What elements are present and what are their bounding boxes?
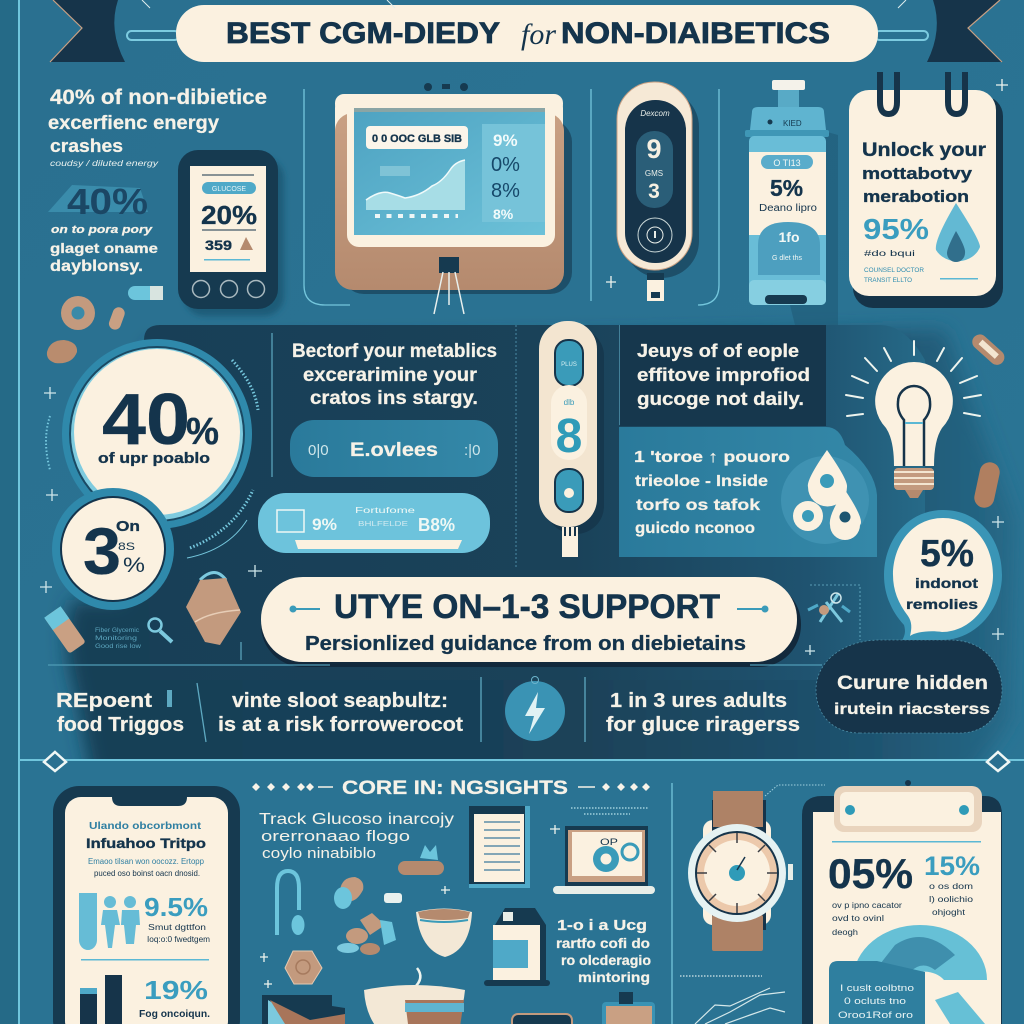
bottom strip: risk: is at a risk forrowerocot	[218, 714, 463, 736]
left text block: coudsy / diluted energy	[50, 159, 159, 168]
icon: tan capsule	[972, 460, 1002, 510]
title text: NON-DIAIBETICS	[561, 17, 830, 50]
icon: jar	[484, 908, 550, 986]
center glucose meter: dlb	[564, 398, 575, 407]
phone device: 20%	[201, 200, 257, 230]
big stat circle: 40	[102, 380, 190, 460]
donut chart	[853, 925, 987, 1024]
speech bubble stat	[884, 510, 1002, 644]
glucose meter top: Dexcom	[640, 109, 670, 118]
title banner	[50, 0, 1002, 62]
ribbon right	[927, 0, 1002, 62]
teal note: Oroo1Rof oro	[838, 1010, 913, 1020]
notepad: mottabotvy	[862, 164, 973, 183]
vertical divider bottom	[671, 783, 673, 1024]
big stat circle: of upr poablo	[98, 450, 210, 467]
icon: lightning circle	[505, 676, 565, 741]
teal panel with drops	[619, 427, 877, 557]
left text block: glaget oname	[50, 240, 158, 256]
clipboard: ov p ipno cacator	[832, 901, 902, 910]
notepad	[849, 72, 1003, 308]
monitor screen: 0 0 OOC GLB SIB	[372, 133, 462, 145]
icon: leaf bar	[398, 845, 444, 875]
title text	[226, 17, 830, 51]
text box: improved glucose: Jeuys of of eople	[637, 341, 799, 361]
icon: laptop: OP	[600, 837, 618, 847]
left text block	[48, 86, 267, 275]
clip	[834, 780, 982, 832]
text: monitoring: 1-o i a Ucg	[557, 917, 647, 934]
phone lower left: Emaoo tilsan won oocozz. Ertopp	[88, 857, 205, 866]
text: monitoring: rartfo cofi do	[556, 935, 650, 951]
horizontal rule	[48, 664, 822, 666]
left text block: dayblonsy.	[50, 258, 143, 275]
notepad: merabotion	[863, 187, 969, 206]
icon: steam and bowl	[364, 968, 465, 1024]
callout: support pill	[261, 577, 801, 667]
small label: Good rise low	[95, 644, 142, 650]
monitor screen: 8%	[491, 180, 520, 202]
phone lower left	[53, 786, 240, 1024]
small stat circle: 3	[83, 514, 121, 588]
icon: donut	[61, 296, 95, 330]
phone lower left: Smut dgttfon	[148, 923, 206, 932]
pill: stats: 9%	[312, 515, 337, 534]
line chart	[366, 160, 465, 216]
icon: nugget	[186, 572, 241, 645]
teal panel with drops: trieoloe - Inside	[635, 473, 768, 490]
bottle: 5%	[770, 175, 803, 201]
notepad: #do bqui	[864, 249, 915, 258]
icon: small pill	[107, 306, 126, 331]
pill: stats: B8%	[418, 515, 455, 535]
watch	[688, 785, 825, 951]
glucose meter top: 9	[646, 134, 662, 164]
small label: Fiber Glycemic	[95, 628, 139, 634]
icon: tan bag	[602, 992, 655, 1024]
text: metabolics: Bectorf your metablics	[292, 341, 497, 362]
text: monitoring	[556, 917, 651, 985]
small stat circle: 8S	[118, 541, 135, 553]
text: track glucose: coylo ninabiblo	[262, 845, 376, 862]
icon: food pieces	[334, 877, 402, 955]
arrows	[290, 608, 765, 610]
notepad: TRANSIT ELLTO	[864, 278, 912, 284]
glucose meter top: GMS	[645, 169, 663, 178]
icon: nut	[47, 340, 77, 363]
text: metabolics: cratos ins stargy.	[310, 388, 478, 409]
text: track glucose: orerronaao flogo	[261, 828, 410, 845]
text box: improved glucose: effitove improfiod	[637, 365, 810, 385]
bottom strip: risk	[218, 690, 463, 736]
monitor screen: 8%	[493, 206, 514, 222]
teal panel with drops: torfo os tafok	[636, 497, 760, 514]
pill: stats	[258, 493, 490, 553]
left text block: on to pora pory	[51, 224, 153, 236]
bottom strip: food triggers: food Triggos	[57, 714, 184, 736]
phone lower left: Infuahoo Tritpo	[86, 835, 206, 851]
small stat circle: %	[123, 554, 145, 577]
bottle: KIED	[783, 119, 802, 128]
teal note: 0 ocluts tno	[844, 996, 906, 1006]
pill: evolves	[290, 420, 498, 477]
text: track glucose: Track Glucoso inarcojy	[259, 811, 454, 828]
pill: evolves: E.ovlees	[350, 440, 438, 461]
callout: support pill: Persionlized guidance from on diebietains	[305, 633, 746, 655]
small stat circle: On	[116, 518, 140, 535]
phone lower left: Fog oncoiqun.	[139, 1009, 210, 1020]
bottle: O TI13	[773, 158, 801, 168]
clipboard: l) oolichio	[929, 895, 974, 904]
icon: hexagon nut	[285, 951, 322, 984]
left text block: 40% of non-dibietice	[50, 86, 267, 109]
monitor screen: 9%	[493, 131, 518, 150]
text: monitoring: mintoring	[578, 969, 650, 985]
icon: tool cluster	[808, 585, 860, 640]
notepad: Unlock your	[862, 140, 987, 161]
monitor screen	[354, 108, 545, 235]
teal panel with drops: 1 'toroe ↑ pouoro	[634, 449, 790, 466]
text: metabolics	[292, 341, 497, 409]
phone device	[178, 150, 284, 316]
left text block: excerfienc energy	[48, 113, 219, 134]
decorative dots and sparkles	[40, 360, 1004, 655]
clipboard: 15%	[924, 851, 980, 881]
cable clip	[434, 257, 464, 314]
icon: tube and people	[79, 893, 140, 950]
monitor	[335, 83, 572, 314]
small stat circle	[52, 488, 174, 610]
divider lines top row	[304, 89, 719, 305]
small dotted caption	[571, 808, 648, 814]
icon: cup	[416, 908, 472, 957]
text box: improved glucose: gucoge not daily.	[637, 389, 804, 409]
center glucose meter	[539, 321, 604, 557]
icon: eraser	[44, 606, 86, 654]
teal note: I cuslt oolbtno	[840, 983, 914, 993]
speech bubble stat: 5%	[920, 533, 974, 575]
pill: stats: BHLFELDE	[358, 521, 408, 528]
text: track glucose	[259, 811, 454, 862]
dark callout: hidden insulin	[816, 640, 1002, 733]
icon: dark box	[262, 995, 345, 1024]
bottom strip: adults: for gluce riragerss	[606, 714, 800, 736]
icon: tan tray	[512, 1014, 572, 1024]
icon: laptop	[553, 826, 655, 894]
lightbulb	[846, 341, 981, 498]
pill: stats: Fortufome	[355, 506, 416, 515]
notepad: 95%	[863, 214, 929, 246]
center glucose meter: PLUS	[561, 362, 577, 368]
speech bubble stat: indonot	[915, 575, 978, 591]
bottom strip: risk: vinte sloot seapbultz:	[232, 690, 448, 712]
phone lower left: Ulando obcorbmont	[89, 821, 202, 832]
clipboard: ovd to ovinl	[832, 914, 884, 923]
icon: capsule	[128, 286, 163, 300]
clipboard: o os dom	[929, 882, 973, 891]
icon: drops	[781, 450, 869, 544]
phone lower left: 19%	[144, 975, 208, 1005]
big stat circle	[62, 339, 252, 529]
ribbon left	[50, 0, 125, 62]
phone device: 359	[205, 237, 232, 253]
title text: BEST CGM-DIEDY	[226, 17, 500, 50]
big stat circle: %	[186, 411, 219, 453]
glucose meter top	[617, 82, 699, 301]
bottle	[745, 80, 838, 325]
center glucose meter: 8	[556, 410, 582, 463]
glucose meter top: 3	[648, 180, 660, 203]
chart lines	[680, 976, 785, 1024]
small label: Monitoring	[95, 636, 137, 642]
dividers central	[241, 325, 620, 660]
icon: document	[469, 806, 530, 888]
clipboard: 05%	[828, 850, 913, 897]
phone lower left: 9.5%	[144, 892, 208, 922]
bottle: 1fo	[778, 229, 800, 245]
left text block: crashes	[50, 136, 123, 156]
teal note	[829, 961, 925, 1024]
teal panel with drops: guicdo nconoo	[635, 520, 755, 537]
bottom strip: food triggers	[56, 690, 184, 736]
text box: improved glucose	[620, 325, 826, 426]
title text: for	[521, 18, 556, 51]
binder rings	[880, 72, 965, 114]
phone device: GLUCOSE	[212, 186, 246, 193]
bottle: Deano lipro	[759, 203, 817, 214]
rays	[846, 341, 981, 416]
callout: support pill: UTYE ON–1-3 SUPPORT	[334, 588, 720, 626]
sparkles lower and upper	[260, 79, 1008, 988]
bottle: G dlet ths	[772, 255, 802, 262]
text: monitoring: ro olcderagio	[561, 952, 651, 968]
text: metabolics: excerarimine your	[303, 365, 478, 386]
bottom strip: adults	[606, 690, 800, 736]
phone lower left: puced oso boinst oacn dnosid.	[94, 869, 200, 878]
pill: evolves: 0|0	[308, 442, 329, 459]
monitor screen: 0%	[491, 154, 520, 176]
dark callout: hidden insulin: Curure hidden	[837, 673, 988, 694]
diamonds	[44, 752, 1009, 771]
speech bubble stat: remolies	[906, 596, 978, 612]
dark central panel	[66, 325, 1015, 780]
clipboard: ohjoght	[932, 908, 966, 917]
dark callout: hidden insulin: irutein riacsterss	[834, 701, 990, 718]
bottom strip: adults: 1 in 3 ures adults	[610, 690, 787, 712]
capture marker	[142, 0, 906, 8]
section heading: core insights	[252, 778, 650, 799]
phone lower left: Ioq:o:0 fwedtgem	[147, 935, 210, 944]
bottom strip: food triggers: REpoent	[56, 690, 152, 712]
clipboard	[802, 780, 1002, 1024]
small label	[95, 628, 142, 650]
left text block: 40%	[67, 181, 148, 222]
clipboard: deogh	[832, 928, 858, 937]
notepad: COUNSEL DOCTOR	[864, 268, 925, 274]
section heading: core insights: CORE IN: NGSIGHTS	[342, 778, 568, 799]
pill: evolves: :|0	[464, 442, 480, 459]
icon: tongs	[277, 871, 304, 935]
icon: magnifier	[148, 618, 172, 642]
icon: blood drop	[936, 203, 980, 262]
icon: tan capsule top right	[969, 331, 1007, 368]
